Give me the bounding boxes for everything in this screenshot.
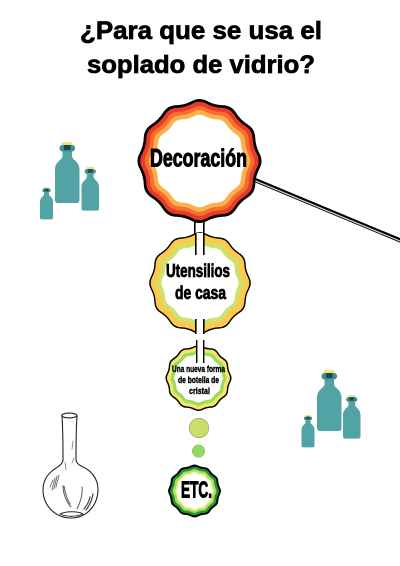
icon: bottles bottom right [302, 370, 361, 447]
badge: ETC. [168, 465, 221, 517]
title [80, 17, 322, 79]
badge: Utensilios de casa [149, 232, 251, 334]
label: Utensilios de casa [166, 261, 230, 303]
bottle: large [317, 370, 342, 431]
badge: Una nueva forma de botella de cristal [165, 340, 232, 411]
diagonal line from Decoración [255, 180, 400, 243]
label: Utensilios de casa: de casa [175, 283, 227, 303]
badge: Decoración [137, 99, 262, 223]
icon: bottles top left [40, 142, 99, 219]
bottle: right [82, 167, 99, 211]
label: Una nueva forma de botella de cristal: Una nueva forma [172, 364, 226, 374]
label: Utensilios de casa: Utensilios [166, 261, 230, 281]
connector: Decoración to Utensilios [194, 215, 205, 257]
dot: small [192, 445, 205, 457]
bottle: right [343, 395, 361, 439]
title: ¿Para que se usa el [80, 17, 322, 45]
bottle: small [302, 415, 314, 447]
bottle: small [40, 187, 53, 219]
connector: Utensilios to botella [195, 319, 204, 364]
dot: large [189, 418, 209, 438]
bottle: large [55, 142, 80, 203]
title: soplado de vidrio? [87, 51, 315, 79]
label: Una nueva forma de botella de cristal [172, 364, 226, 396]
label: Una nueva forma de botella de cristal: de botella de [178, 375, 219, 385]
connector segment over botella badge [196, 340, 204, 363]
connector segment over Utensilios [195, 233, 205, 334]
label: ETC.: ETC. [181, 476, 212, 502]
icon: glass flask [43, 413, 98, 518]
label: Decoración: Decoración [150, 144, 247, 172]
label: Una nueva forma de botella de cristal: cristal [189, 386, 210, 396]
